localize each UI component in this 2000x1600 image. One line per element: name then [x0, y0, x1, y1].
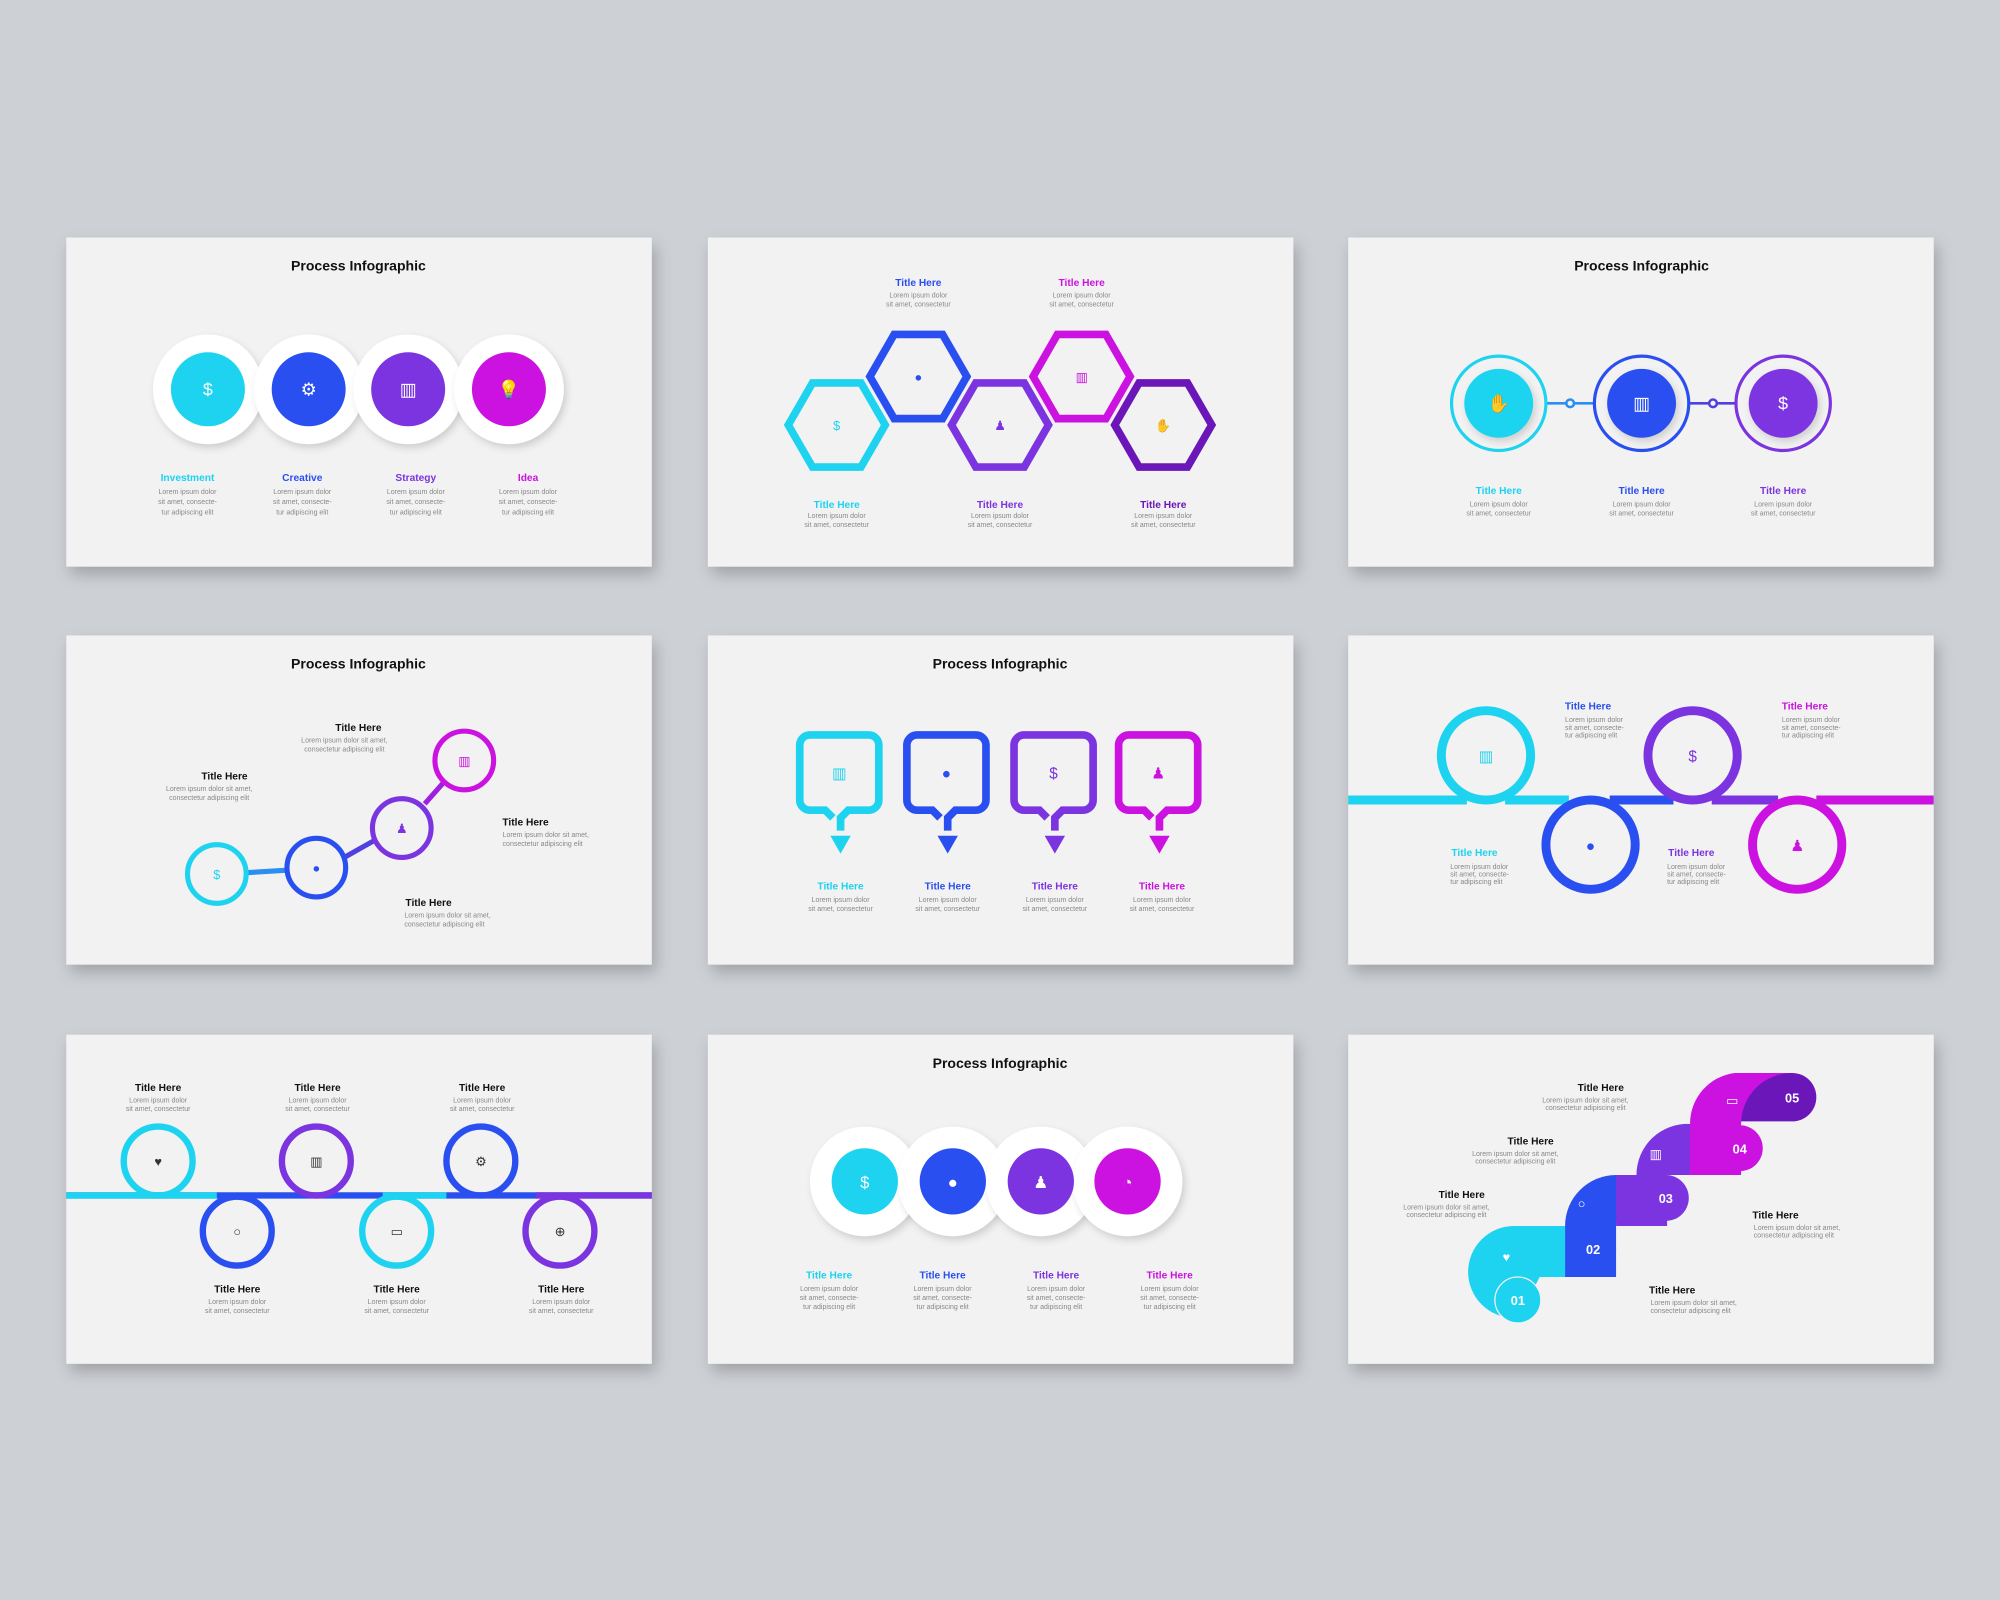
step labels: Title Here [502, 818, 549, 829]
step labels: Lorem ipsum dolor sit amet, [503, 832, 589, 839]
loop labels: Lorem ipsum dolor [129, 1097, 188, 1104]
circle row [810, 1127, 1182, 1236]
stair labels: consectetur adipiscing elit [1406, 1212, 1487, 1219]
stair labels: consectetur adipiscing elit [1651, 1308, 1731, 1315]
panel: pin squares: ♟ [1151, 765, 1165, 782]
labels: tur adipiscing elit [276, 509, 328, 516]
labels: tur adipiscing elit [390, 509, 442, 516]
labels: tur adipiscing elit [1144, 1304, 1196, 1311]
labels: Strategy [395, 473, 437, 484]
ring labels: Lorem ipsum dolor [1470, 502, 1528, 509]
stair labels: Title Here [1507, 1136, 1554, 1147]
panel: circles process [66, 238, 652, 567]
loop labels: sit amet, consecte- [1565, 725, 1624, 732]
labels: Title Here [806, 1270, 853, 1281]
step labels: Lorem ipsum dolor sit amet, [301, 738, 388, 745]
pin labels: Lorem ipsum dolor [1026, 897, 1085, 904]
circle row: ♟ [1033, 1173, 1048, 1192]
title: Process Infographic [291, 656, 426, 672]
pin labels: sit amet, consectetur [1130, 906, 1195, 913]
hex labels: Lorem ipsum dolor [889, 292, 948, 299]
pin labels: Title Here [817, 881, 864, 892]
circle row: ⚙ [301, 380, 317, 400]
stair shapes: 03 [1659, 1191, 1673, 1206]
hex labels: sit amet, consectetur [968, 522, 1033, 529]
labels: Lorem ipsum dolor [159, 489, 217, 496]
stair labels: Lorem ipsum dolor sit amet, [1542, 1097, 1629, 1104]
loop line [66, 1127, 652, 1266]
loop labels: Lorem ipsum dolor [1782, 717, 1841, 724]
labels: Lorem ipsum dolor [499, 489, 558, 496]
loop labels: Lorem ipsum dolor [1667, 864, 1726, 871]
step labels: Title Here [405, 898, 452, 909]
panel: numbered stairs [1348, 1035, 1934, 1364]
loop labels: Title Here [1668, 848, 1715, 859]
stair shapes: ▭ [1726, 1093, 1738, 1108]
stair labels: Lorem ipsum dolor sit amet, [1472, 1151, 1559, 1158]
pin labels: sit amet, consectetur [1023, 906, 1088, 913]
ring labels: sit amet, consectetur [1466, 511, 1532, 518]
circle row: ▥ [400, 380, 417, 400]
loop labels: Title Here [214, 1284, 261, 1295]
ring labels: Lorem ipsum dolor [1754, 502, 1813, 509]
pin labels: Lorem ipsum dolor [919, 897, 977, 904]
loop labels: tur adipiscing elit [1667, 879, 1719, 886]
panel: hexagons: ● [915, 370, 922, 385]
loop labels: sit amet, consecte- [1782, 725, 1841, 732]
step labels: Title Here [335, 723, 382, 734]
loop labels: Title Here [538, 1284, 585, 1295]
pins [800, 735, 1198, 831]
labels: sit amet, consecte- [1140, 1295, 1200, 1302]
hex labels: Title Here [977, 500, 1023, 511]
panel: hexagons: $ [833, 418, 840, 433]
loop labels: Lorem ipsum dolor [453, 1097, 512, 1104]
panel: hexagons: ✋ [1155, 418, 1171, 433]
step labels: consectetur adipiscing elit [304, 747, 385, 754]
step labels: Lorem ipsum dolor sit amet, [404, 912, 491, 919]
hex labels: Title Here [895, 278, 942, 289]
hexagon chain [788, 334, 1212, 467]
pin labels: Title Here [925, 881, 971, 892]
panel: wave loops small: ⚙ [475, 1154, 487, 1169]
labels: Title Here [1033, 1270, 1080, 1281]
stair labels: Title Here [1752, 1210, 1799, 1221]
ring labels: Title Here [1760, 486, 1807, 497]
stair shapes: ♥ [1503, 1250, 1510, 1265]
hex labels: Lorem ipsum dolor [971, 513, 1030, 520]
panel: pin squares: ● [942, 765, 951, 782]
hex labels: Title Here [1059, 278, 1105, 289]
ring labels: Lorem ipsum dolor [1613, 502, 1671, 509]
panel: pin squares: ▥ [832, 765, 847, 782]
panel: wave loops large [1348, 635, 1934, 965]
labels: tur adipiscing elit [161, 509, 214, 516]
circle row: $ [203, 380, 213, 400]
labels: Investment [161, 473, 215, 484]
panel: pin squares: $ [1049, 765, 1058, 782]
stair labels: Lorem ipsum dolor sit amet, [1651, 1300, 1737, 1307]
pin labels: sit amet, consectetur [915, 906, 981, 913]
hex labels: sit amet, consectetur [804, 522, 870, 529]
panel: wave loops small [66, 1035, 652, 1364]
labels: sit amet, consecte- [1027, 1295, 1086, 1302]
ring labels: Title Here [1476, 486, 1522, 497]
stair labels: Title Here [1578, 1083, 1624, 1094]
circle row: ● [948, 1173, 958, 1192]
stair labels: Title Here [1439, 1190, 1485, 1201]
loop labels: sit amet, consectetur [450, 1106, 515, 1113]
hex labels: sit amet, consectetur [1131, 522, 1196, 529]
panel: ascending steps: ● [312, 861, 320, 876]
pin labels: Lorem ipsum dolor [1133, 897, 1192, 904]
loop labels: tur adipiscing elit [1450, 879, 1502, 886]
labels: Lorem ipsum dolor [1141, 1286, 1199, 1293]
loop labels: Lorem ipsum dolor [1450, 864, 1509, 871]
stair shapes: 05 [1785, 1090, 1799, 1105]
loop labels: tur adipiscing elit [1565, 732, 1617, 739]
loop labels: Lorem ipsum dolor [208, 1299, 267, 1306]
labels: Lorem ipsum dolor [387, 489, 445, 496]
pin labels: Lorem ipsum dolor [812, 897, 870, 904]
step labels: consectetur adipiscing elit [169, 795, 249, 802]
rings: ✋ [1488, 393, 1510, 414]
hex labels: Lorem ipsum dolor [1053, 292, 1111, 299]
labels: sit amet, consecte- [273, 499, 332, 506]
hex labels: Lorem ipsum dolor [808, 513, 866, 520]
loop labels: Title Here [1565, 701, 1611, 712]
hex labels [804, 278, 1196, 529]
step labels: consectetur adipiscing elit [503, 841, 583, 848]
labels: Idea [518, 473, 539, 484]
loop line [1348, 711, 1934, 889]
hex labels: Title Here [1140, 500, 1187, 511]
hex labels: sit amet, consectetur [1049, 301, 1115, 308]
stair shapes: ▥ [1650, 1146, 1662, 1161]
loop labels: Lorem ipsum dolor [1565, 717, 1624, 724]
labels: Lorem ipsum dolor [914, 1286, 972, 1293]
circle row: $ [860, 1173, 869, 1192]
panel: ascending steps: $ [213, 867, 220, 882]
labels: tur adipiscing elit [917, 1304, 969, 1311]
panel: wave loops small: ⊕ [555, 1224, 565, 1239]
labels: sit amet, consecte- [386, 499, 446, 506]
stair shapes: 01 [1511, 1293, 1525, 1308]
labels: Lorem ipsum dolor [1027, 1286, 1086, 1293]
labels: tur adipiscing elit [502, 509, 554, 516]
circle row: 💡 [498, 379, 520, 400]
hex labels: sit amet, consectetur [886, 301, 951, 308]
panel: wave loops small: ○ [233, 1224, 241, 1239]
labels: sit amet, consecte- [800, 1295, 859, 1302]
panel: wave loops small: ▥ [310, 1154, 322, 1169]
stair labels: consectetur adipiscing elit [1754, 1232, 1834, 1239]
step labels: Title Here [201, 772, 248, 783]
loop labels: Lorem ipsum dolor [289, 1097, 347, 1104]
loop labels: sit amet, consectetur [364, 1308, 430, 1315]
panel: ascending steps: ▥ [458, 754, 470, 769]
panel: wave loops large: ▥ [1479, 749, 1493, 766]
labels: Title Here [919, 1270, 966, 1281]
rings: $ [1778, 394, 1788, 414]
stair labels: Lorem ipsum dolor sit amet, [1403, 1204, 1490, 1211]
pin labels: sit amet, consectetur [808, 906, 874, 913]
panel: ring timeline [1348, 238, 1934, 567]
ring labels: sit amet, consectetur [1751, 511, 1816, 518]
panel: wave loops small: ▭ [391, 1224, 403, 1239]
loop labels [1450, 701, 1841, 886]
loop labels: Lorem ipsum dolor [368, 1299, 426, 1306]
labels: sit amet, consecte- [499, 499, 558, 506]
stair labels: consectetur adipiscing elit [1545, 1105, 1626, 1112]
labels: Creative [282, 473, 323, 484]
panel: hexagons: ♟ [994, 418, 1006, 433]
stair shapes [1468, 1073, 1816, 1323]
loop labels: sit amet, consectetur [205, 1308, 270, 1315]
panel: wave loops large: $ [1688, 749, 1697, 766]
panel: ascending steps [66, 635, 652, 965]
loop labels: Lorem ipsum dolor [532, 1299, 591, 1306]
stair labels: Lorem ipsum dolor sit amet, [1754, 1225, 1840, 1232]
stair labels: Title Here [1649, 1286, 1696, 1297]
stair labels: consectetur adipiscing elit [1475, 1159, 1555, 1166]
panel: ascending steps: ♟ [396, 821, 408, 836]
labels: tur adipiscing elit [1030, 1304, 1082, 1311]
step labels [166, 723, 589, 928]
loop labels: Title Here [1451, 848, 1498, 859]
labels: Title Here [1147, 1270, 1193, 1281]
loop labels: sit amet, consectetur [126, 1106, 191, 1113]
pin labels: Title Here [1139, 881, 1185, 892]
panel: pin squares [708, 635, 1293, 965]
labels: Lorem ipsum dolor [273, 489, 332, 496]
rings: ▥ [1633, 394, 1650, 414]
hex labels: Lorem ipsum dolor [1134, 513, 1193, 520]
loop labels: sit amet, consectetur [529, 1308, 594, 1315]
loop labels: sit amet, consecte- [1667, 872, 1727, 879]
panel: hexagons: ▥ [1076, 370, 1088, 385]
loop labels: sit amet, consecte- [1450, 872, 1510, 879]
ring labels [1466, 486, 1816, 518]
loop labels: tur adipiscing elit [1782, 732, 1834, 739]
labels: sit amet, consecte- [158, 499, 218, 506]
title: Process Infographic [291, 258, 426, 274]
labels: sit amet, consecte- [913, 1295, 973, 1302]
loop labels: Title Here [294, 1083, 341, 1094]
title: Process Infographic [933, 656, 1068, 672]
title: Process Infographic [1574, 258, 1709, 274]
hex labels: Title Here [814, 500, 860, 511]
step labels: consectetur adipiscing elit [404, 921, 485, 928]
loop labels: Title Here [459, 1083, 506, 1094]
pin labels: Title Here [1032, 881, 1078, 892]
loop labels: sit amet, consectetur [285, 1106, 351, 1113]
panel: hexagons [708, 238, 1293, 567]
circle row [153, 334, 564, 444]
stair labels [1403, 1083, 1840, 1315]
ascending circles [188, 731, 494, 903]
circle row: ◔ [1123, 1173, 1133, 1192]
loop labels: Title Here [135, 1083, 182, 1094]
panel: wave loops large: ♟ [1790, 838, 1804, 855]
loop labels [126, 1083, 594, 1315]
pin labels [808, 881, 1195, 913]
stair shapes: 04 [1733, 1141, 1748, 1156]
panel: wave loops small: ♥ [154, 1154, 162, 1169]
ring labels: sit amet, consectetur [1609, 511, 1675, 518]
step labels: Lorem ipsum dolor sit amet, [166, 786, 252, 793]
labels: Lorem ipsum dolor [800, 1286, 859, 1293]
panel: wave loops large: ● [1586, 838, 1595, 855]
stair shapes: 02 [1586, 1242, 1600, 1257]
title: Process Infographic [933, 1055, 1068, 1071]
panel: circles process 2 [708, 1035, 1293, 1364]
rings [1452, 356, 1830, 451]
labels [158, 473, 558, 516]
labels: tur adipiscing elit [803, 1304, 855, 1311]
labels [800, 1270, 1200, 1311]
loop labels: Title Here [374, 1284, 420, 1295]
loop labels: Title Here [1782, 701, 1828, 712]
ring labels: Title Here [1618, 486, 1665, 497]
stair shapes: ○ [1578, 1196, 1585, 1211]
